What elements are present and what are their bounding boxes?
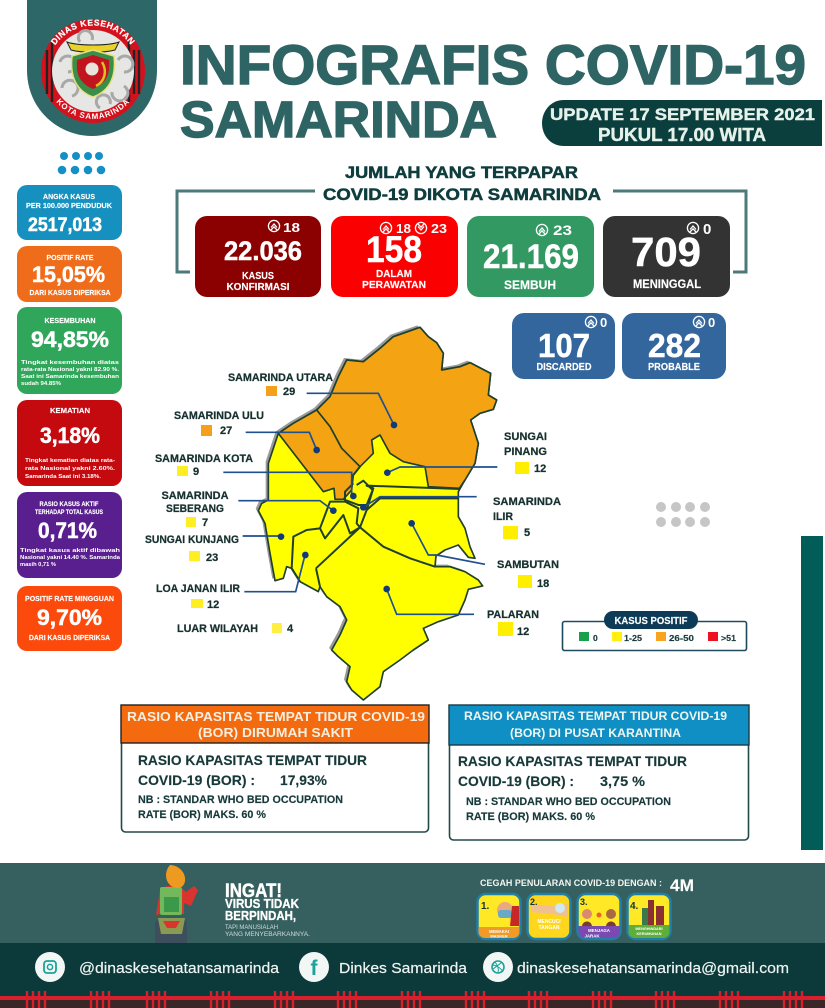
card: sembuh: 23 xyxy=(553,222,572,238)
card: kesembuhan: 94,85% xyxy=(31,327,109,352)
panel: BOR rumah sakit: RASIO KAPASITAS TEMPAT TIDUR xyxy=(138,752,367,768)
panel: BOR rumah sakit: COVID-19 (BOR) : xyxy=(138,772,255,788)
icon: memakai masker: 1. xyxy=(481,901,490,912)
label: samarinda seberang: SAMARINDA xyxy=(162,490,229,502)
heading: cegah penularan 4M: CEGAH PENULARAN COVID-19 DENGAN : xyxy=(480,878,662,888)
card: probable xyxy=(622,313,726,379)
label: sungai kunjang xyxy=(145,534,239,564)
card: meninggal: MENINGGAL xyxy=(633,279,701,291)
card: kasus konfirmasi: 18 xyxy=(283,220,300,235)
text: email: dinaskesehatansamarinda@gmail.com xyxy=(517,960,789,977)
card: rasio kasus aktif: 0,71% xyxy=(38,518,97,543)
text: ingat virus tidak berpindah: BERPINDAH, xyxy=(225,908,296,923)
heading: jumlah terpapar: JUMLAH YANG TERPAPAR xyxy=(345,164,578,182)
icon: instagram xyxy=(35,952,65,982)
card: discarded: DISCARDED xyxy=(536,362,592,373)
card: positif rate: POSITIF RATE xyxy=(46,253,94,262)
panel: BOR pusat karantina: COVID-19 (BOR) : xyxy=(458,773,574,789)
label: loa janan ilir: LOA JANAN ILIR xyxy=(156,583,240,595)
panel: BOR rumah sakit xyxy=(121,705,429,832)
legend: kasus positif: 26-50 xyxy=(669,633,694,643)
card: kematian xyxy=(17,400,122,486)
text: ingat virus tidak berpindah: VIRUS TIDAK xyxy=(225,896,300,911)
heading: jumlah terpapar: COVID-19 DIKOTA SAMARINDA xyxy=(323,186,601,204)
card: kematian: rata Nasional yakni 2.60%. xyxy=(25,466,116,472)
card: rasio kasus aktif: Tingkat kasus aktif dibawah xyxy=(20,548,121,554)
icon: facebook xyxy=(299,952,329,982)
card: dalam perawatan: DALAM xyxy=(376,269,412,280)
card: angka kasus xyxy=(17,185,122,240)
label: luar wilayah: 4 xyxy=(287,623,294,635)
panel: BOR pusat karantina: (BOR) DI PUSAT KARANTINA xyxy=(510,726,681,740)
icon: menjaga jarak: MENJAGA xyxy=(588,928,611,933)
shield with logo xyxy=(27,0,157,136)
card: rasio kasus aktif xyxy=(17,492,122,578)
card: discarded xyxy=(512,313,615,379)
label: samarinda ilir: ILIR xyxy=(493,511,513,523)
card: dalam perawatan: 158 xyxy=(366,229,422,270)
update date banner: PUKUL 17.00 WITA xyxy=(598,125,766,145)
icon: memakai masker: MEMAKAI xyxy=(489,929,509,934)
card: probable: 0 xyxy=(708,315,715,330)
label: samarinda kota xyxy=(155,453,253,478)
card: rasio kasus aktif: RASIO KASUS AKTIF xyxy=(40,501,99,508)
icon: mencuci tangan: MENCUCI xyxy=(537,919,561,925)
text: ingat virus tidak berpindah xyxy=(225,881,310,938)
label: samarinda utara xyxy=(228,372,333,398)
icon: memakai masker xyxy=(478,894,520,939)
label: samarinda ulu xyxy=(174,410,264,437)
label: samarinda ilir xyxy=(493,496,561,539)
title: SAMARINDA xyxy=(180,91,497,148)
card: kematian: 3,18% xyxy=(40,423,100,448)
icon: menghindari kerumunan: MENGHINDARI xyxy=(635,927,663,931)
shield with logo: KOTA SAMARINDA xyxy=(56,98,130,120)
update date banner xyxy=(542,100,822,146)
region: samarinda ulu xyxy=(278,410,360,499)
card: kesembuhan: KESEMBUHAN xyxy=(44,316,96,325)
text: facebook name: Dinkes Samarinda xyxy=(339,960,468,977)
card: angka kasus: ANGKA KASUS xyxy=(43,192,95,201)
card: sembuh xyxy=(467,216,594,297)
label: palaran xyxy=(487,609,539,638)
card: angka kasus: 2517,013 xyxy=(28,215,102,236)
legend: kasus positif: >51 xyxy=(721,633,736,643)
card: meninggal: 0 xyxy=(703,221,711,238)
card: kesembuhan: rata-rata Nasional yakni 82.90 %. xyxy=(21,367,120,373)
panel: BOR pusat karantina xyxy=(449,705,749,840)
label: samarinda seberang xyxy=(162,490,229,529)
panel: BOR pusat karantina: RASIO KAPASITAS TEMPAT TIDUR COVID-19 xyxy=(464,709,727,723)
label: samarinda ilir: 5 xyxy=(524,527,530,539)
icon: menjaga jarak: 3. xyxy=(580,897,588,907)
card: probable: PROBABLE xyxy=(648,362,700,373)
text: ingat virus tidak berpindah: TAPI MANUSIALAH xyxy=(225,925,278,931)
left column stat cards xyxy=(17,185,122,651)
card: positif rate: DARI KASUS DIPERIKSA xyxy=(30,288,111,297)
label: sambutan: SAMBUTAN xyxy=(497,559,559,571)
card: positif rate mingguan: DARI KASUS DIPERIKSA xyxy=(29,633,111,642)
card: kesembuhan: sudah 94.85% xyxy=(21,381,61,387)
panel: BOR pusat karantina: RATE (BOR) MAKS. 60 % xyxy=(466,811,595,823)
label: palaran: 12 xyxy=(517,626,529,638)
card: dalam perawatan: 23 xyxy=(431,221,447,236)
card: dalam perawatan: PERAWATAN xyxy=(362,280,426,291)
panel: BOR rumah sakit: 17,93% xyxy=(280,772,328,788)
legend: kasus positif: 0 xyxy=(593,633,598,643)
icon: mencuci tangan xyxy=(528,894,570,939)
panel: BOR rumah sakit: NB : STANDAR WHO BED OCCUPATION xyxy=(138,794,343,806)
panel: BOR rumah sakit: RATE (BOR) MAKS. 60 % xyxy=(138,809,266,821)
card: positif rate xyxy=(17,246,122,302)
heading: cegah penularan 4M xyxy=(480,877,694,895)
panel: BOR rumah sakit: RASIO KAPASITAS TEMPAT TIDUR COVID-19 xyxy=(127,709,425,724)
card: meninggal: 709 xyxy=(631,229,701,275)
card: kasus konfirmasi: KONFIRMASI xyxy=(226,282,290,293)
card: kesembuhan: Saat ini Samarinda kesembuhan xyxy=(21,374,120,380)
icon: mencuci tangan: 2. xyxy=(530,897,538,907)
label: samarinda seberang: 7 xyxy=(202,517,208,529)
card: kematian: KEMATIAN xyxy=(50,406,90,415)
card: discarded: 0 xyxy=(600,315,607,330)
blue dots decoration xyxy=(58,152,105,174)
label: samarinda kota: 9 xyxy=(193,466,199,478)
icon: menghindari kerumunan xyxy=(628,894,670,939)
label: samarinda seberang: SEBERANG xyxy=(166,503,224,515)
card: dalam perawatan: 18 xyxy=(396,221,411,236)
title: INFOGRAFIS COVID-19 xyxy=(180,33,806,96)
grey dots decoration xyxy=(656,502,710,527)
card: kesembuhan: Tingkat kesembuhan diatas xyxy=(21,360,119,366)
label: loa janan ilir: 12 xyxy=(207,599,219,611)
icon: memakai masker: MASKER xyxy=(490,934,508,938)
icon: mencuci tangan: TANGAN xyxy=(538,925,560,931)
card: sembuh: 21.169 xyxy=(483,238,579,276)
card: kematian: Tingkat kematian diatas rata- xyxy=(25,458,115,464)
region: samarinda utara xyxy=(317,327,497,488)
card: kasus konfirmasi: KASUS xyxy=(242,271,274,282)
card: positif rate mingguan: 9,70% xyxy=(37,605,102,630)
text: instagram handle: @dinaskesehatansamarinda xyxy=(79,960,280,977)
legend: kasus positif: 1-25 xyxy=(624,633,642,643)
text: ingat virus tidak berpindah: YANG MENYEBARKANNYA. xyxy=(225,932,310,938)
card: rasio kasus aktif: TERHADAP TOTAL KASUS xyxy=(35,509,104,516)
label: samarinda ulu: SAMARINDA ULU xyxy=(174,410,264,422)
card: rasio kasus aktif: masih 0,71 % xyxy=(20,562,56,568)
social media band xyxy=(0,943,825,1008)
label: loa janan ilir xyxy=(156,583,240,611)
label: palaran: PALARAN xyxy=(487,609,539,621)
panel: BOR rumah sakit: (BOR) DIRUMAH SAKIT xyxy=(198,725,353,740)
panel: BOR pusat karantina: RASIO KAPASITAS TEMPAT TIDUR xyxy=(458,753,687,769)
heading: cegah penularan 4M: 4M xyxy=(670,877,694,895)
icon: facebook: f xyxy=(310,957,318,980)
card: positif rate mingguan: POSITIF RATE MINGGUAN xyxy=(25,594,114,603)
card: kasus konfirmasi xyxy=(195,216,321,297)
label: luar wilayah: LUAR WILAYAH xyxy=(177,623,258,635)
card: kematian: Samarinda Saat ini 3.18%. xyxy=(25,474,102,480)
map of Samarinda districts xyxy=(223,325,497,700)
label: sungai pinang: SUNGAI xyxy=(504,431,547,443)
label: sungai pinang xyxy=(504,431,547,475)
icon: motorcycle rider xyxy=(155,865,198,943)
shield with logo: DINAS KESEHATAN xyxy=(50,20,135,46)
label: sambutan xyxy=(497,559,559,590)
label: samarinda utara: 29 xyxy=(283,386,295,398)
label: samarinda ulu: 27 xyxy=(220,425,232,437)
icon: menghindari kerumunan: KERUMUNAN xyxy=(637,932,662,936)
label: sungai kunjang: 23 xyxy=(206,552,218,564)
card: positif rate mingguan xyxy=(17,586,122,651)
card: kesembuhan xyxy=(17,307,122,394)
heading: jumlah terpapar xyxy=(323,164,601,204)
panel: BOR pusat karantina: NB : STANDAR WHO BED OCCUPATION xyxy=(466,796,671,808)
icon: menjaga jarak xyxy=(578,894,620,939)
legend: kasus positif: KASUS POSITIF xyxy=(614,616,688,627)
label: samarinda ilir: SAMARINDA xyxy=(493,496,561,508)
card: discarded: 107 xyxy=(538,327,590,364)
card: sembuh: SEMBUH xyxy=(504,278,556,292)
panel: BOR pusat karantina: 3,75 % xyxy=(600,773,646,789)
label: sambutan: 18 xyxy=(537,578,549,590)
card: probable: 282 xyxy=(648,327,701,364)
card: rasio kasus aktif: Nasional yakni 14.40 %. Samarinda xyxy=(20,555,121,561)
card: kasus konfirmasi: 22.036 xyxy=(224,236,302,266)
icon: menjaga jarak: JARAK xyxy=(584,934,600,938)
icon: menghindari kerumunan: 4. xyxy=(630,901,639,912)
label: sungai pinang: PINANG xyxy=(504,446,547,458)
legend: kasus positif xyxy=(562,611,746,650)
text: ingat virus tidak berpindah: INGAT! xyxy=(225,881,282,902)
footer band xyxy=(0,863,825,943)
label: samarinda utara: SAMARINDA UTARA xyxy=(228,372,333,384)
card: meninggal xyxy=(603,216,730,297)
title xyxy=(180,33,806,148)
card: dalam perawatan xyxy=(331,216,458,297)
card: positif rate: 15,05% xyxy=(32,262,105,287)
label: sungai kunjang: SUNGAI KUNJANG xyxy=(145,534,239,546)
map labels xyxy=(145,372,561,638)
card: angka kasus: PER 100.000 PENDUDUK xyxy=(26,201,113,210)
label: samarinda kota: SAMARINDA KOTA xyxy=(155,453,253,465)
icon: website xyxy=(483,952,513,982)
label: sungai pinang: 12 xyxy=(534,463,546,475)
update date banner: UPDATE 17 SEPTEMBER 2021 xyxy=(550,105,815,124)
